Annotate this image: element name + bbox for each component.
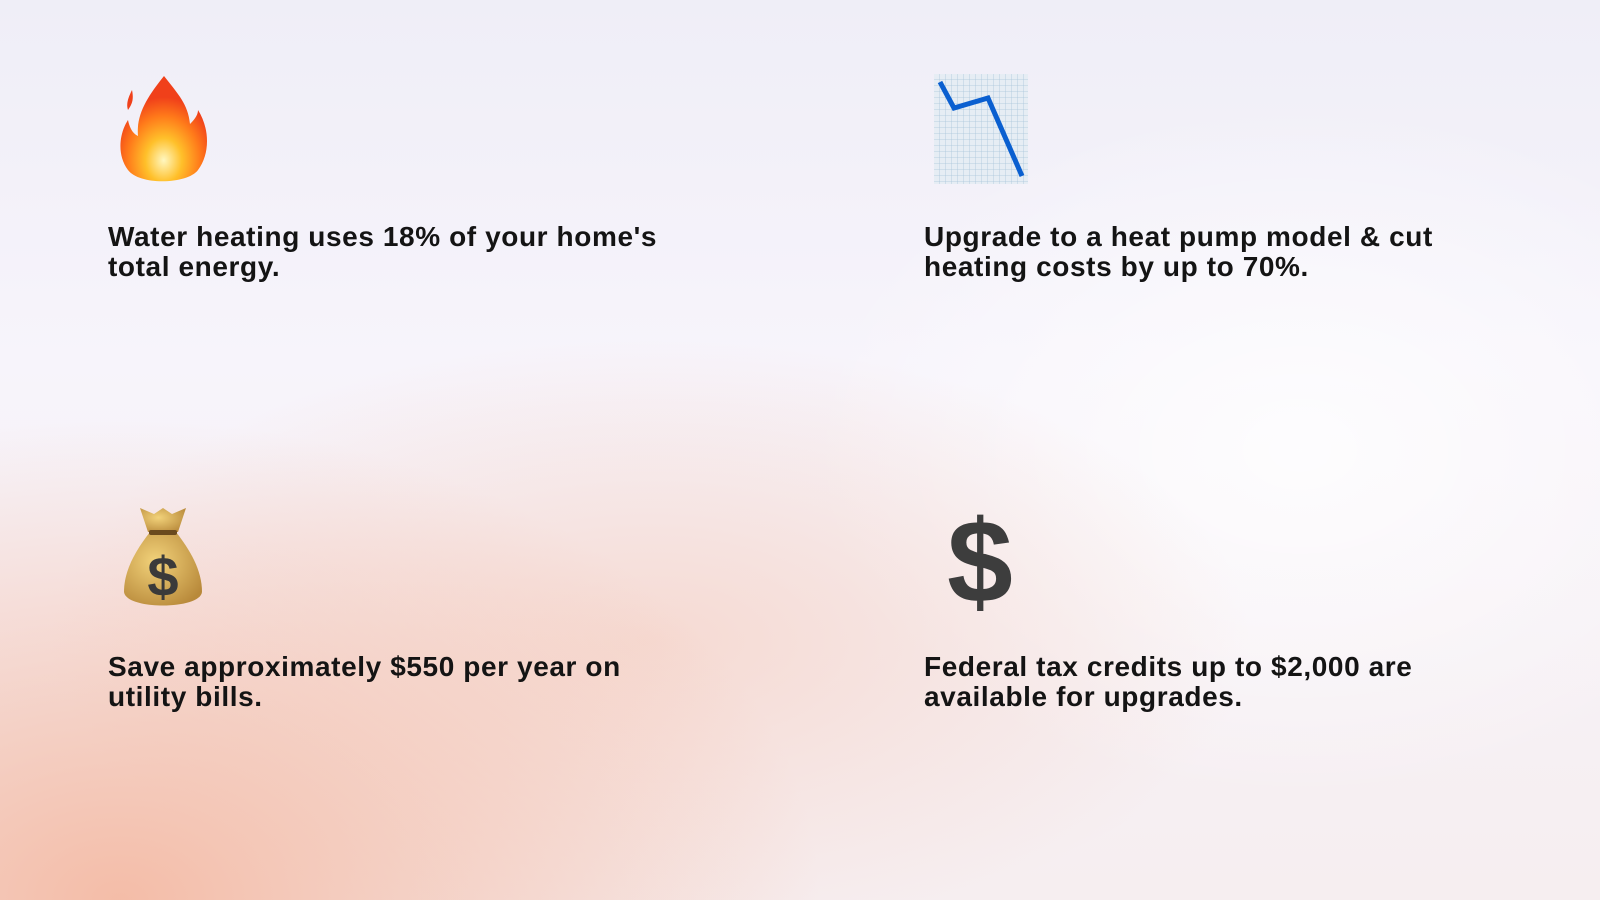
text: savings: utility bills.: [108, 681, 263, 712]
text: savings: Save approximately $550 per year on: [108, 651, 621, 682]
text: heat pump: heating costs by up to 70%.: [924, 251, 1309, 282]
text: tax credits: [924, 651, 1412, 712]
text: tax credits: Federal tax credits up to $2,000 are: [924, 651, 1412, 682]
text: heat pump: Upgrade to a heat pump model & cut: [924, 221, 1433, 252]
icon: money bag: $: [147, 545, 179, 608]
text: water heating: [108, 221, 657, 282]
text: tax credits: available for upgrades.: [924, 681, 1243, 712]
text: heat pump: [924, 221, 1433, 282]
text: water heating: total energy.: [108, 251, 280, 282]
icon: chart decreasing: [934, 74, 1028, 184]
icon: fire: [120, 76, 207, 182]
text: savings: [108, 651, 621, 712]
icon: money bag: [124, 508, 202, 608]
text: water heating: Water heating uses 18% of your home's: [108, 221, 657, 252]
